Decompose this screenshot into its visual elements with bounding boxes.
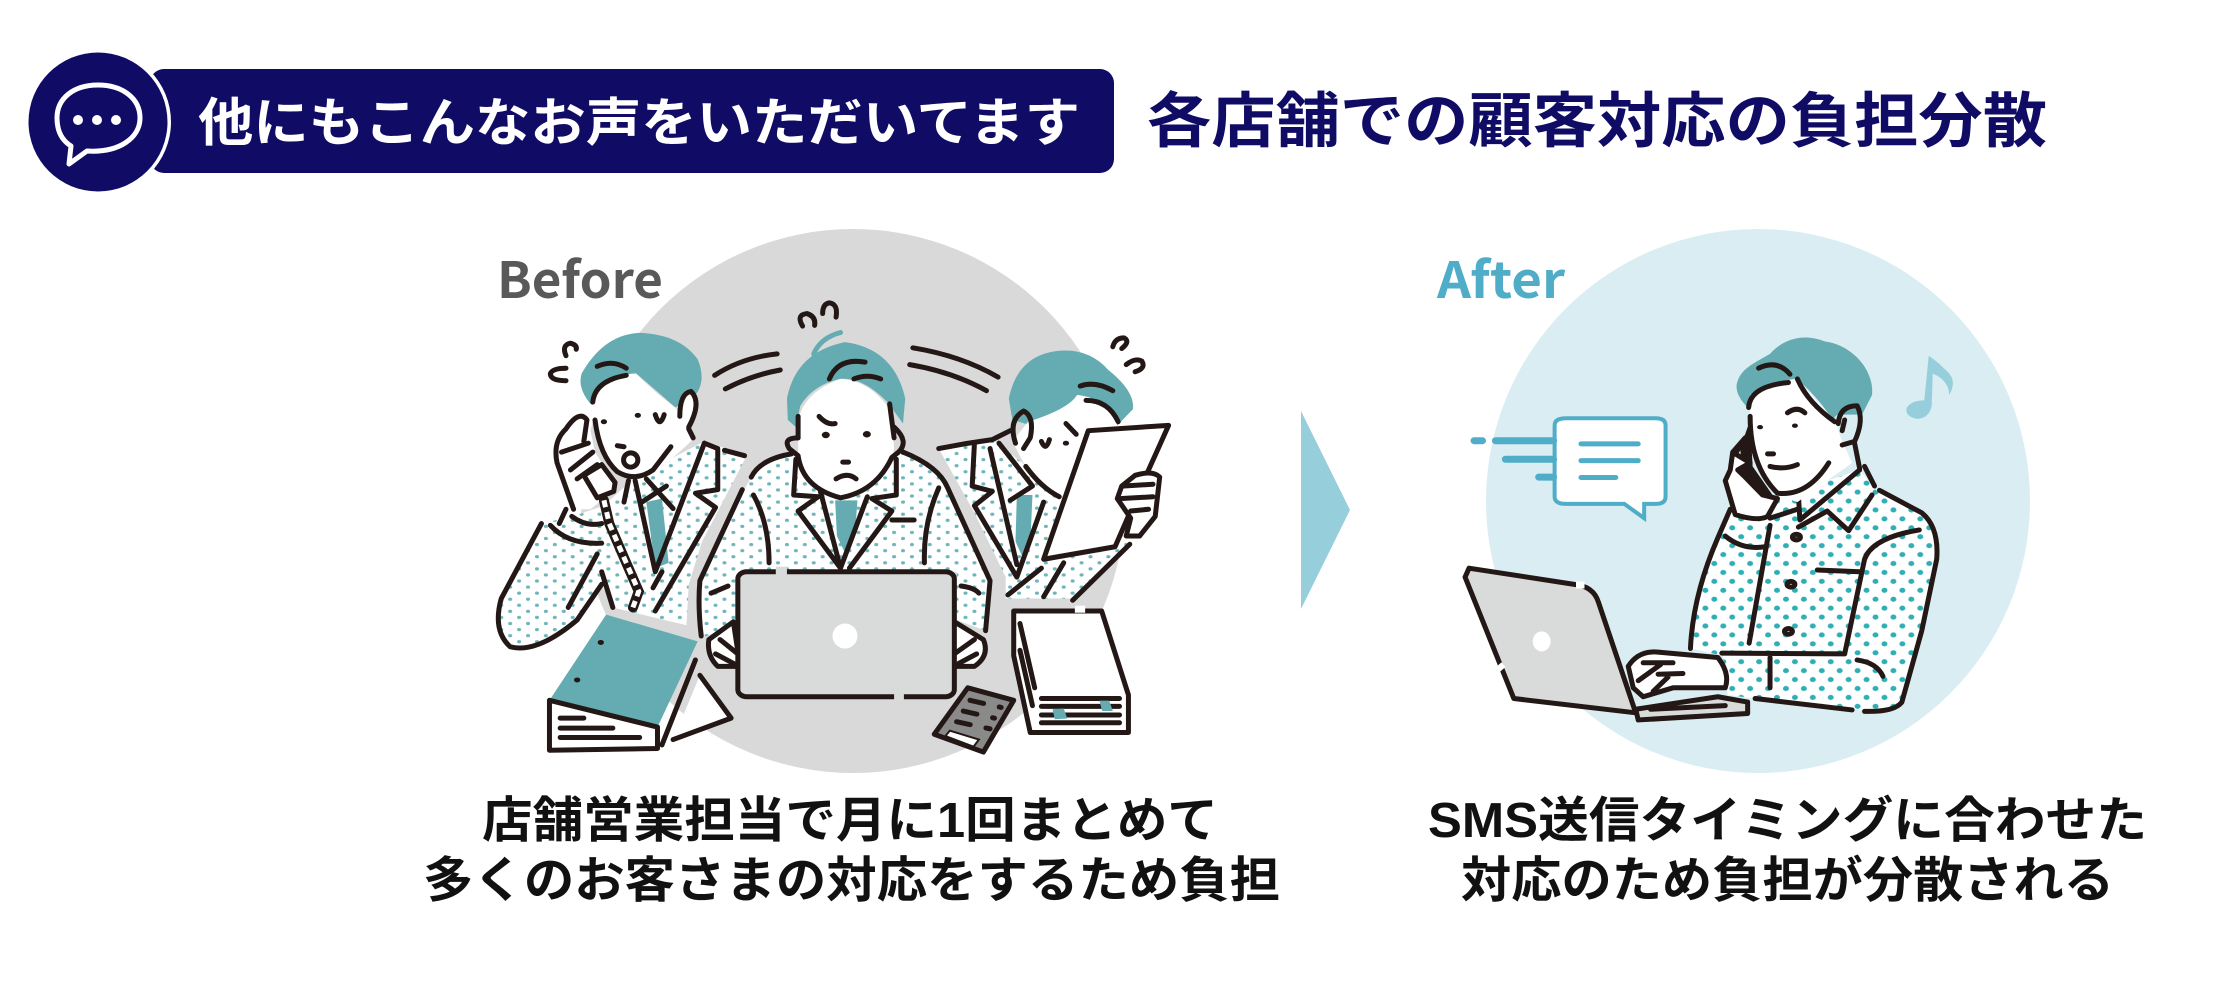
header banner (25, 49, 1114, 195)
before caption: 多くのお客さまの対応をするため負担 (423, 854, 1280, 908)
right worker with document (939, 351, 1169, 600)
typing hand (1628, 652, 1727, 697)
panel: before (497, 229, 1169, 773)
banner text: 他にもこんなお声をいただいてます (198, 95, 1080, 153)
illustration: three busy workers (498, 303, 1169, 752)
arrow (1301, 411, 1350, 609)
laptop (738, 571, 954, 698)
before label: Before (497, 241, 663, 313)
after label: After (1436, 241, 1565, 313)
shirt (1690, 466, 1937, 712)
worry marks (550, 303, 1143, 381)
illustration: relaxed worker on phone (1465, 337, 1953, 720)
left worker on the phone (498, 303, 1143, 648)
after caption (1428, 794, 2147, 908)
banner bar (150, 69, 1114, 173)
motion lines (715, 348, 998, 391)
after caption: 対応のため負担が分散される (1461, 854, 2114, 908)
stacked file (1014, 609, 1128, 732)
icon: message bubble (1474, 418, 1666, 518)
icon: speech bubble badge (25, 49, 171, 195)
panel: after (1436, 229, 2030, 773)
before background circle (581, 229, 1125, 773)
phone and hand (1725, 420, 1778, 519)
after caption: SMS送信タイミングに合わせた (1428, 794, 2147, 848)
telephone handset (584, 465, 615, 498)
center worker with laptop (698, 332, 990, 698)
after background circle (1486, 229, 2030, 773)
before caption: 店舗営業担当で月に1回まとめて (482, 794, 1218, 848)
binder (549, 615, 731, 750)
icon: music note (1906, 356, 1953, 419)
head (1737, 337, 1872, 502)
telephone coil (604, 500, 639, 607)
before caption (423, 794, 1280, 908)
title: 各店舗での顧客対応の負担分散 (1147, 88, 2047, 155)
calculator (934, 688, 1014, 752)
laptop (1465, 568, 1748, 720)
